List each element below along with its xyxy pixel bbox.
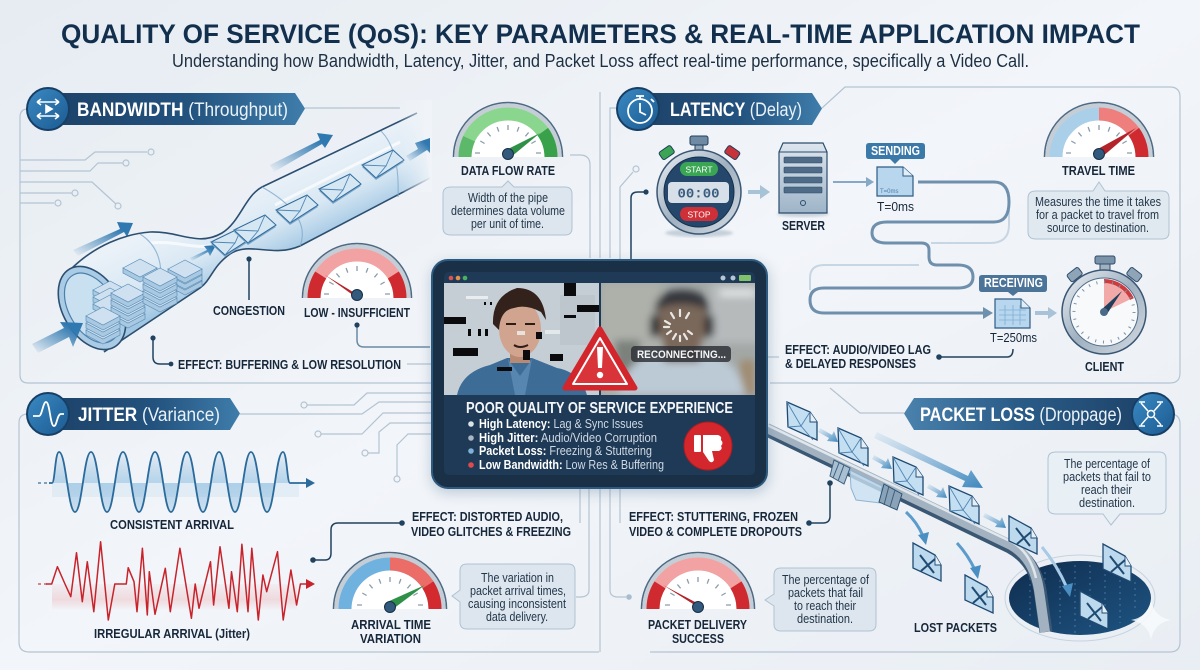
gauge: packet delivery	[642, 552, 754, 612]
circuit traces: bandwidth	[20, 149, 154, 209]
status pill: RECONNECTING...	[637, 349, 726, 361]
status pill	[631, 346, 731, 362]
callout: jitter: packet arrival times,	[470, 584, 566, 598]
callout: packet delivery: to reach their	[794, 599, 856, 613]
panel: tablet video call	[430, 260, 770, 494]
label: packet delivery success	[648, 617, 747, 646]
label: packet delivery success: PACKET DELIVERY	[648, 617, 747, 632]
pipe: far end fade	[398, 100, 432, 192]
tablet inner	[444, 272, 755, 475]
connector: latency stopwatch	[631, 189, 649, 260]
icon: receiving packet	[995, 299, 1030, 328]
chart: consistent arrival wave	[38, 452, 315, 512]
label: t=250: T=250ms	[990, 330, 1037, 345]
heading: poor qos: POOR QUALITY OF SERVICE EXPERIENCE	[466, 400, 733, 417]
heading: latency: LATENCY (Delay)	[670, 100, 802, 121]
arrowhead: route	[983, 307, 993, 319]
callout: jitter	[452, 564, 575, 629]
icon: pulse	[33, 402, 64, 426]
label: arrival time variation	[351, 617, 431, 646]
heading: packet loss: PACKET LOSS (Droppage)	[920, 405, 1122, 426]
icon: thumbs down	[684, 422, 732, 470]
list: effects: Packet Loss: Freezing & Stuttering	[479, 443, 652, 458]
callout: packet delivery: packets that fail	[788, 586, 863, 600]
person body	[457, 358, 587, 395]
pipe: glass rings	[140, 131, 398, 285]
text: effect packet loss	[629, 509, 802, 539]
connector: effect packet loss	[806, 480, 833, 526]
tag: receiving: RECEIVING	[984, 276, 1043, 290]
pipe: mouth ring	[44, 255, 140, 361]
icon: sending packet	[877, 167, 913, 196]
text: effect latency: EFFECT: AUDIO/VIDEO LAG	[785, 342, 931, 357]
arrows: dropping	[906, 512, 1067, 588]
hole: lost packets	[1005, 555, 1155, 641]
list: effects: Low Bandwidth: Low Res & Buffering	[479, 457, 664, 472]
heading: bandwidth: BANDWIDTH (Throughput)	[77, 100, 288, 121]
arrow: in small upper	[73, 222, 133, 256]
subtitle: Understanding how Bandwidth, Latency, Jitter, and Packet Loss affect real-time performance, specifically a Video Call.	[172, 51, 1029, 71]
text: effect latency: & DELAYED RESPONSES	[785, 356, 916, 371]
pipe: upper edge	[70, 113, 417, 270]
label: congestion: CONGESTION	[213, 303, 285, 318]
arrows: between envelopes	[818, 428, 1006, 528]
callout: jitter: The variation in	[481, 571, 554, 585]
stopwatch: client	[1062, 256, 1146, 354]
text: effect jitter: VIDEO GLITCHES & FREEZING	[411, 524, 571, 539]
icon: warning triangle	[565, 329, 635, 388]
icon: server	[777, 143, 829, 217]
spinner	[664, 310, 692, 341]
x packet: in hole bottom	[1080, 591, 1108, 629]
pipe: tube body	[70, 113, 430, 352]
text: effect latency	[785, 342, 931, 371]
icon: scatter	[1139, 402, 1163, 426]
delay route	[810, 182, 1009, 313]
panel border: bandwidth	[20, 92, 600, 383]
callout: travel time: source to destination.	[1047, 221, 1149, 235]
panel: packet loss	[600, 388, 1180, 652]
panel border: packet loss	[600, 388, 1180, 652]
glitches	[444, 283, 599, 371]
decorative line	[407, 363, 432, 365]
banner: packet loss	[904, 393, 1174, 435]
arrow: top right	[270, 133, 333, 172]
label: t=0: T=0ms	[877, 199, 914, 214]
circuit traces: latency	[620, 166, 639, 260]
label: arrival time variation: ARRIVAL TIME	[351, 617, 431, 632]
icon: timer	[628, 96, 654, 123]
chart: irregular arrival wave	[38, 542, 315, 620]
person head	[499, 301, 541, 357]
label: low insufficient: LOW - INSUFFICIENT	[304, 305, 410, 320]
title: QUALITY OF SERVICE (QoS): KEY PARAMETERS & REAL-TIME APPLICATION IMPACT	[61, 19, 1140, 49]
label: client: CLIENT	[1085, 359, 1124, 374]
callout: jitter: causing inconsistent	[468, 597, 566, 611]
status icons	[720, 275, 751, 281]
callout: packet loss top: destination.	[1079, 496, 1135, 510]
x packet: lost middle	[965, 575, 993, 613]
congestion marker	[246, 256, 252, 300]
pipe: lower edge	[104, 178, 430, 352]
callout: packet delivery: The percentage of	[782, 573, 869, 587]
callout: packet delivery: destination.	[797, 612, 853, 626]
gauge: data flow rate	[453, 102, 563, 160]
gauge: arrival time variation	[334, 552, 446, 612]
panel border: latency	[610, 87, 1180, 383]
panel: jitter	[19, 393, 599, 652]
arrowheads: dropping	[918, 532, 1073, 597]
arrow: small inner	[190, 245, 216, 261]
x packet: falling	[1009, 516, 1037, 554]
callout: packet loss top: The percentage of	[1064, 457, 1150, 471]
arrow: stopwatch to server	[748, 185, 770, 199]
tablet shadow	[430, 262, 770, 494]
circuit traces: jitter	[240, 393, 432, 482]
gauge: travel time	[1044, 102, 1154, 160]
label: travel time: TRAVEL TIME	[1062, 163, 1135, 178]
button: stop: STOP	[688, 210, 711, 220]
x packet: lost left	[913, 543, 941, 581]
label: packet delivery success: SUCCESS	[672, 631, 724, 646]
data stacks	[86, 259, 202, 344]
arrow: far right	[406, 138, 430, 161]
display: timer: 00:00	[677, 186, 720, 202]
label: arrival time variation: VARIATION	[360, 631, 421, 646]
envelopes: in transit	[787, 402, 979, 524]
label: server: SERVER	[782, 218, 825, 233]
window dots	[449, 276, 467, 280]
text: effect jitter	[411, 509, 571, 539]
list: effects: High Latency: Lag & Sync Issues	[479, 416, 643, 431]
callout: packet loss top	[1048, 452, 1166, 525]
icon: bandwidth arrows	[37, 99, 59, 119]
decorative line	[768, 356, 779, 358]
arrow: to client	[1035, 307, 1057, 319]
arrow: server to sending	[833, 177, 874, 187]
arrow: entering pipe	[32, 322, 83, 353]
video feed: right	[601, 283, 755, 395]
arrow: big diagonal	[874, 432, 983, 488]
callout: data flow rate: per unit of time.	[471, 217, 544, 231]
callout: data flow rate: determines data volume	[451, 204, 565, 218]
text: effect packet loss: EFFECT: STUTTERING, FROZEN	[629, 509, 798, 524]
tag: receiving	[979, 275, 1047, 296]
callout: packet delivery	[765, 568, 876, 631]
connector: cable joint	[830, 460, 902, 510]
banner: latency	[617, 88, 822, 130]
heading: jitter: JITTER (Variance)	[78, 405, 220, 426]
text: effect packet loss: VIDEO & COMPLETE DROPOUTS	[629, 524, 802, 539]
cable	[767, 425, 1046, 632]
text: effect jitter: EFFECT: DISTORTED AUDIO,	[412, 509, 563, 524]
label: consistent arrival: CONSISTENT ARRIVAL	[110, 517, 234, 532]
callout: travel time: Measures the time it takes	[1035, 195, 1161, 209]
callout: data flow rate	[443, 181, 572, 235]
stopwatch: start stop	[657, 136, 741, 237]
tablet frame	[432, 260, 767, 488]
icon: sparkle	[1131, 600, 1171, 640]
callout: travel time	[1028, 182, 1169, 239]
callout: jitter: data delivery.	[486, 610, 548, 624]
connector: low gauge	[354, 322, 430, 347]
dot: packet loss trace	[626, 594, 632, 600]
button: start: START	[685, 164, 713, 174]
connector: effect latency	[936, 349, 1013, 360]
connector: effect bandwidth	[150, 335, 173, 366]
envelopes in pipe	[211, 150, 404, 257]
icon: sending packet: T=0ms	[880, 189, 899, 195]
list: effects	[468, 416, 664, 472]
callout: packet loss top: reach their	[1081, 483, 1132, 497]
list: effects: High Jitter: Audio/Video Corruption	[479, 430, 657, 445]
label: lost packets: LOST PACKETS	[914, 620, 997, 635]
banner: jitter	[27, 393, 240, 435]
gauge: low	[302, 243, 412, 300]
label: irregular arrival: IRREGULAR ARRIVAL (Jitter)	[94, 626, 250, 641]
panel: bandwidth	[20, 88, 600, 383]
text: effect bandwidth: EFFECT: BUFFERING & LOW RESOLUTION	[178, 357, 401, 372]
callout: packet loss top: packets that fail to	[1063, 470, 1151, 484]
label: data flow rate: DATA FLOW RATE	[461, 163, 555, 178]
panel: latency	[610, 87, 1180, 383]
tag: sending: SENDING	[871, 144, 920, 158]
callout: data flow rate: Width of the pipe	[468, 191, 548, 205]
x packet: in hole right	[1103, 544, 1131, 582]
panel border: jitter	[19, 414, 599, 652]
banner: bandwidth	[27, 88, 305, 130]
video feed: left	[444, 283, 599, 395]
delay route: pale returns	[810, 205, 1009, 290]
tag: sending	[866, 143, 925, 164]
pipe: highlight	[150, 142, 400, 246]
callout: travel time: for a packet to travel from	[1036, 208, 1159, 222]
connector: effect jitter	[310, 520, 405, 563]
